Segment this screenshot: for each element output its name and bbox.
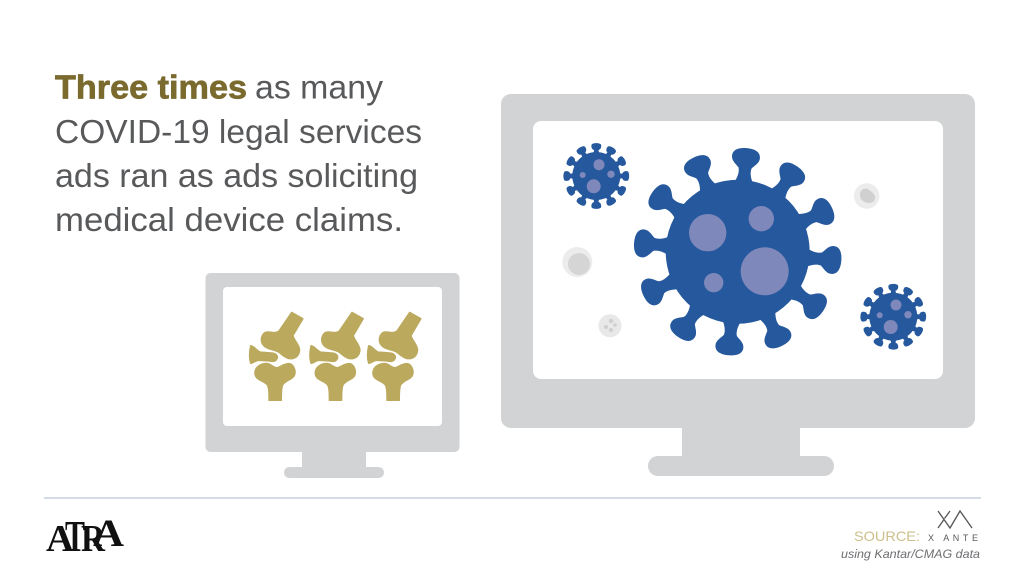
icon: knee joints — [250, 312, 421, 400]
icon: grey cell left — [562, 247, 592, 277]
headline line 4: medical device claims. — [55, 201, 403, 238]
icon: grey cell right — [854, 183, 879, 209]
large monitor with coronavirus — [501, 94, 975, 476]
large monitor neck — [682, 425, 800, 460]
logo: ATRA: A — [46, 518, 75, 560]
small monitor neck — [302, 450, 366, 470]
icon: small virus lower right — [860, 284, 926, 350]
small monitor frame — [206, 273, 460, 452]
small monitor screen — [223, 287, 442, 426]
logo: X Ante mark — [938, 511, 972, 528]
large monitor frame — [501, 94, 975, 428]
headline line 2: COVID-19 legal services — [55, 113, 422, 150]
footer divider — [44, 497, 981, 499]
icon: large virus — [625, 139, 850, 364]
large monitor stand base — [648, 456, 834, 476]
icon: knee joint 3 — [368, 312, 421, 400]
headline line 3: ads ran as ads soliciting — [55, 157, 418, 194]
icon: grey cell bottom — [598, 314, 622, 337]
logo: ATRA: T — [65, 512, 85, 561]
small monitor stand base — [284, 467, 384, 478]
icon: knee joint 1 — [250, 312, 303, 400]
source label: SOURCE: — [854, 528, 920, 544]
logo: ATRA: R — [81, 518, 105, 560]
logo: ATRA — [46, 512, 124, 561]
source note: using Kantar/CMAG data — [841, 547, 980, 561]
icon: knee joint 2 — [310, 312, 363, 400]
headline line 1: as many — [255, 68, 384, 106]
large monitor screen — [533, 121, 943, 379]
X Ante wordmark: X ANTE — [928, 533, 978, 543]
logo: ATRA: A — [93, 512, 124, 555]
icon: small virus upper left — [563, 143, 629, 209]
small monitor with three knee joints — [206, 273, 460, 478]
headline — [55, 68, 422, 238]
headline line 1: Three times — [55, 68, 247, 106]
